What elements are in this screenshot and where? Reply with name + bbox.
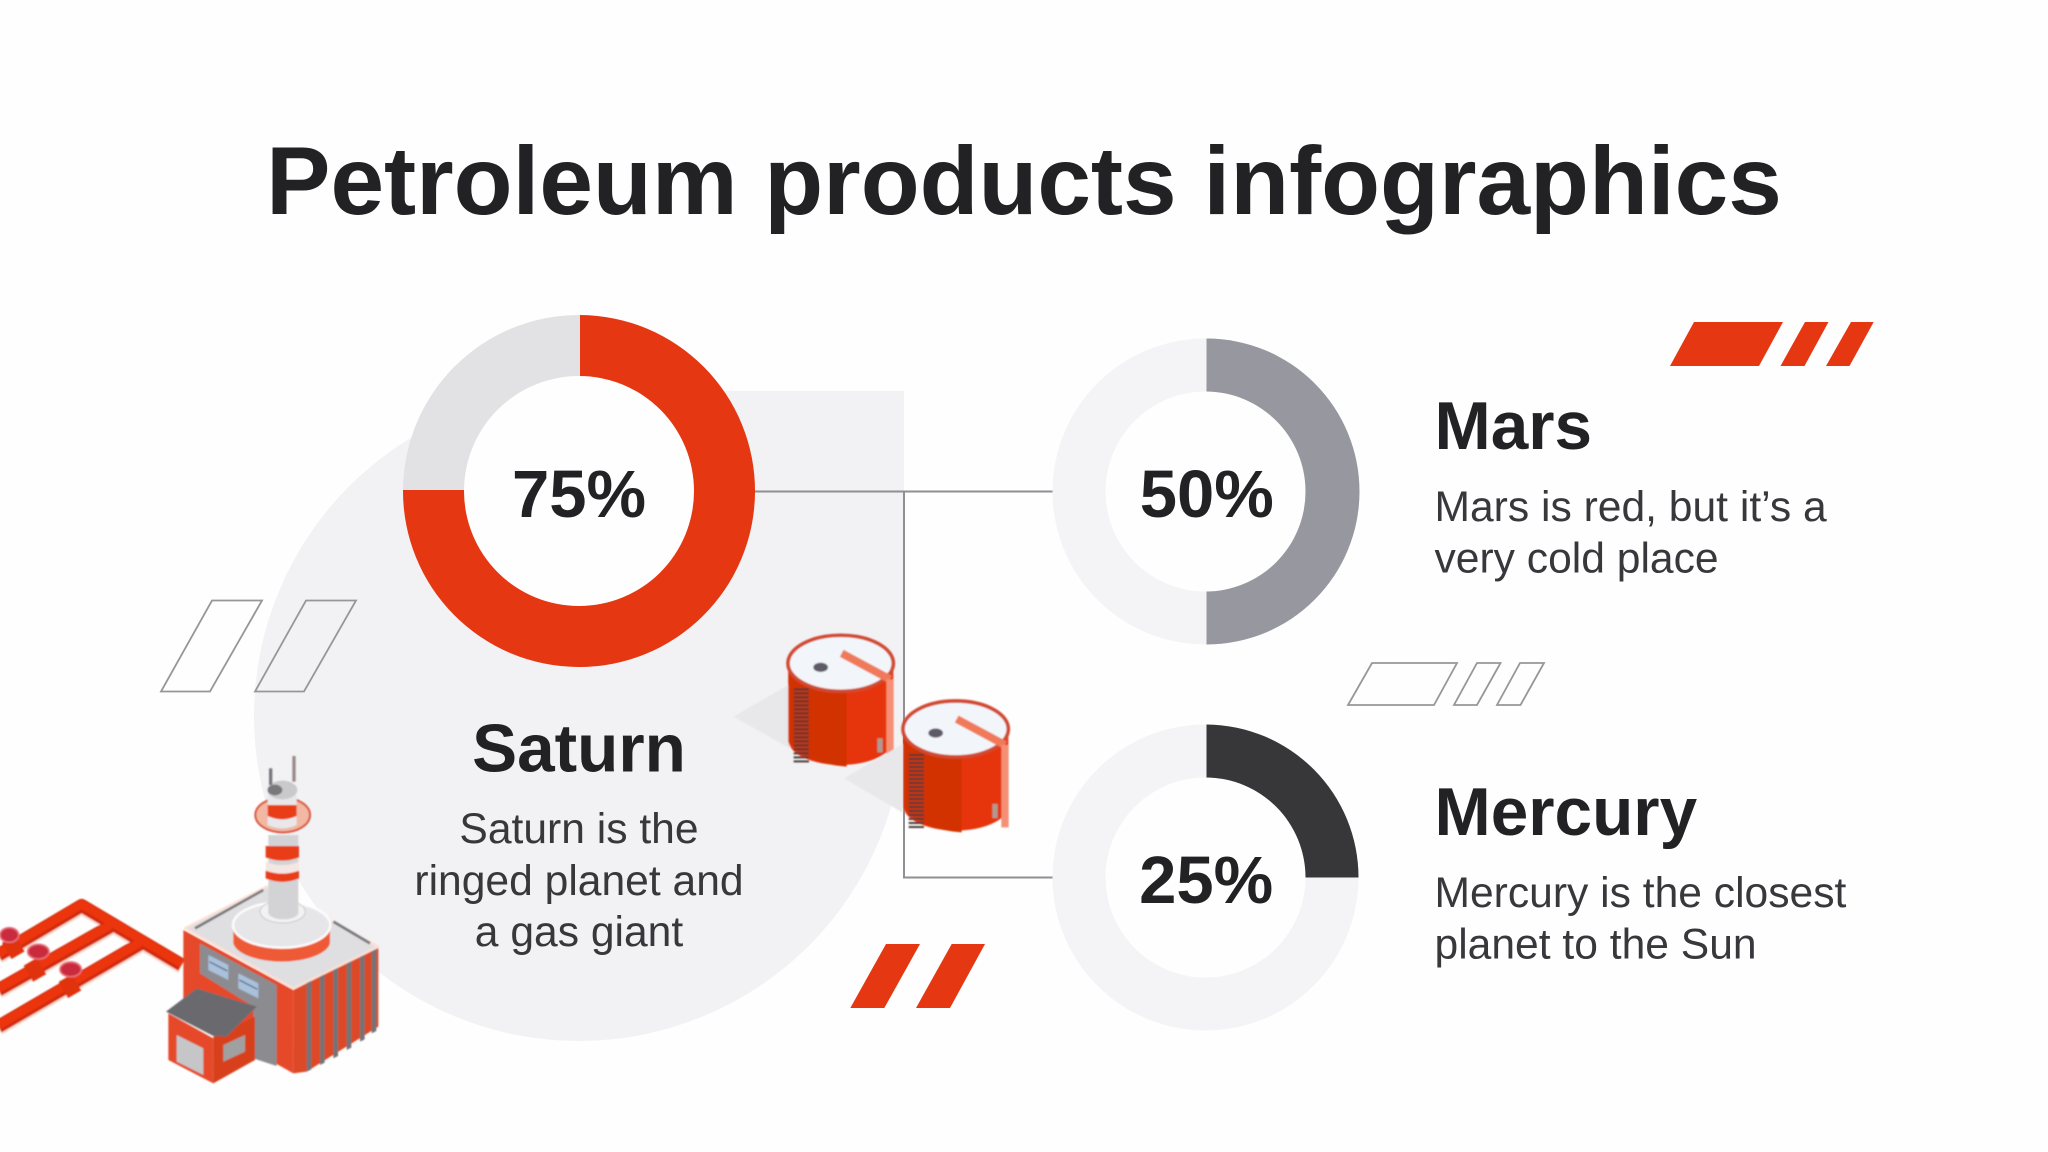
- connector lines: [750, 491, 1056, 878]
- donut chart: Saturn 75%: 75%: [512, 457, 646, 532]
- text block: Saturn: ringed planet and: [414, 857, 744, 905]
- tower: [233, 756, 330, 962]
- text block: Mars: [1434, 389, 1827, 582]
- text block: Mercury: planet to the Sun: [1434, 920, 1757, 968]
- decoration: red bars bottom: [850, 944, 985, 1008]
- decoration: outlined bars right: [1348, 663, 1544, 705]
- pipe valves: [0, 928, 81, 977]
- text block: Mars: Mars is red, but it’s a: [1434, 483, 1827, 531]
- title: Petroleum products infographics: [266, 128, 1782, 235]
- building: [183, 887, 378, 1073]
- text block: Mars: Mars: [1434, 389, 1592, 464]
- donut chart: Mars 50%: 50%: [1140, 457, 1274, 532]
- donut chart: Saturn 75%: [403, 315, 755, 667]
- icon: tank two: [844, 701, 1008, 832]
- text block: Mercury: [1434, 775, 1847, 968]
- decoration: outlined bars left: [161, 600, 356, 692]
- donut chart: Mercury 25%: 25%: [1139, 843, 1273, 918]
- background teardrop shape: [254, 391, 904, 1041]
- icon: tank one: [733, 635, 893, 767]
- annex: [166, 988, 257, 1083]
- text block: Mars: very cold place: [1434, 534, 1719, 582]
- text block: Mercury: Mercury is the closest: [1434, 869, 1847, 917]
- donut chart: Mars 50%: [1052, 338, 1360, 644]
- icon: refinery with pipes: [0, 756, 378, 1083]
- icon: storage tanks: [733, 635, 1008, 832]
- donut chart: Mercury 25%: [1052, 724, 1358, 1030]
- decoration: red bars top right: [1670, 322, 1874, 366]
- text block: Saturn: [414, 712, 744, 956]
- text block: Saturn: Saturn is the: [459, 805, 699, 853]
- text block: Mercury: Mercury: [1434, 775, 1698, 850]
- pipes: [0, 904, 182, 1028]
- text block: Saturn: a gas giant: [475, 908, 683, 956]
- text block: Saturn: Saturn: [472, 712, 686, 786]
